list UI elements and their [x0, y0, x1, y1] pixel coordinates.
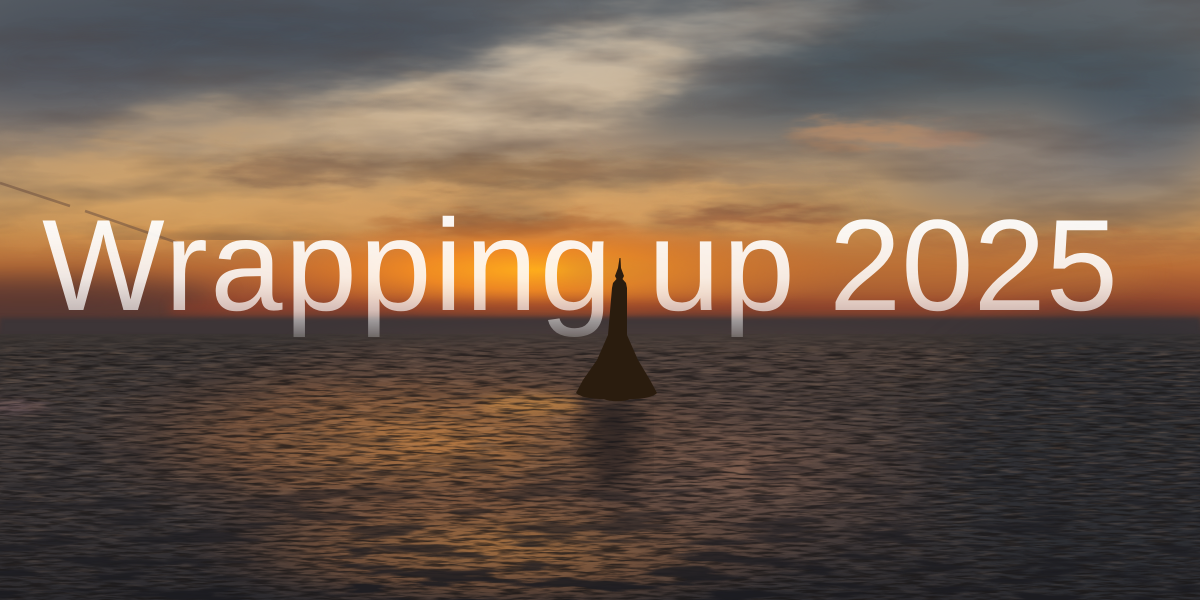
water ripples [0, 333, 1200, 600]
dark cloud upper right [620, 20, 1200, 201]
cool right water [930, 330, 1200, 600]
dim left horizon [0, 278, 220, 326]
bright glint beside buoy [478, 395, 582, 415]
dark cloud top left [0, 0, 530, 123]
warm streaks and dark cloud band [0, 126, 1200, 254]
bright cream clouds [0, 0, 851, 222]
horizon band [170, 302, 1200, 314]
large dark waves [0, 380, 1200, 600]
sea [0, 330, 1200, 600]
pink glint at left edge [0, 402, 50, 412]
title: Wrapping [42, 192, 612, 338]
title: up [648, 192, 795, 338]
title: 2025 [829, 192, 1118, 338]
cloud texture [0, 0, 1200, 240]
warm reflection on water [70, 335, 790, 545]
sun glow [220, 220, 860, 320]
buoy silhouette [576, 258, 657, 401]
sky background [0, 0, 1200, 336]
contrail [0, 183, 178, 243]
buoy reflection [586, 390, 638, 490]
title [42, 192, 1118, 338]
right warm band [550, 244, 1150, 300]
